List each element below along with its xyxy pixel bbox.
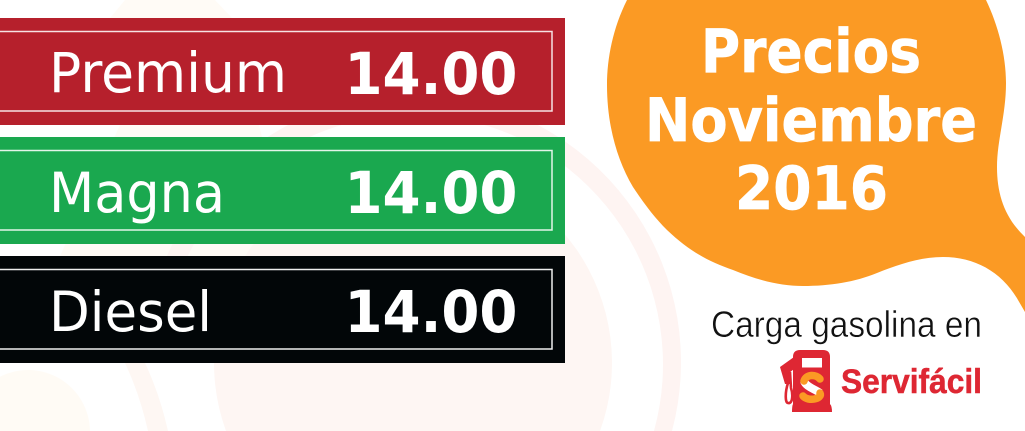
price: Diesel: 14.00: [344, 278, 518, 346]
panel: Diesel price: [0, 256, 565, 363]
text: Carga gasolina en: Carga gasolina en: [711, 304, 982, 345]
title: Precios Noviembre 2016: Noviembre: [645, 86, 977, 156]
title: Precios Noviembre 2016: [645, 17, 977, 224]
label: Premium: Premium: [49, 41, 287, 105]
icon: Servifácil fuel pump: [780, 350, 832, 412]
label: Magna: Magna: [49, 161, 225, 225]
title: Precios Noviembre 2016: 2016: [735, 154, 888, 224]
panel: Premium price: [0, 18, 565, 125]
title: Precios Noviembre 2016: Precios: [701, 17, 921, 87]
text: Servifácil: Servifácil: [841, 363, 982, 401]
background watermark shapes: [0, 0, 681, 431]
price: Magna: 14.00: [344, 159, 518, 227]
panel: Magna price: [0, 137, 565, 244]
price: Premium: 14.00: [344, 40, 518, 108]
label: Diesel: Diesel: [49, 280, 212, 344]
orange speech bubble: [607, 0, 1025, 312]
